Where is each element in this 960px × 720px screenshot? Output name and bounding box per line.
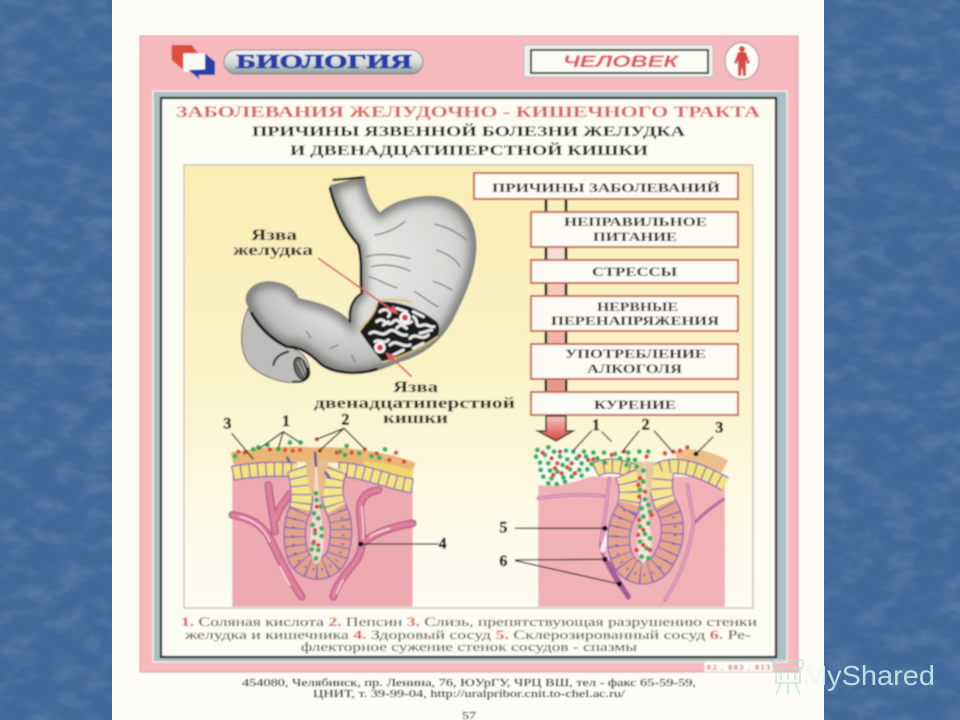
epithelium surface (595, 466, 725, 575)
cell nuclei (293, 510, 343, 570)
page sheet (112, 0, 824, 720)
epithelium surface (232, 468, 413, 570)
numbers: 4 (439, 536, 447, 553)
vessels (232, 485, 413, 597)
acid dots (536, 447, 650, 558)
numbers: 1 (592, 417, 600, 434)
numbers (499, 416, 723, 570)
cause: alcohol (531, 344, 738, 379)
poster (140, 36, 798, 720)
crypt lumen (310, 457, 324, 564)
title: И ДВЕНАДЦАТИПЕРСТНОЙ КИШКИ (290, 142, 649, 159)
stomach body (246, 177, 476, 374)
label: duodenal ulcer: Язва (393, 379, 438, 396)
cause: stress (531, 260, 738, 283)
mucosa cutaway (360, 301, 439, 362)
illustration: stomach (242, 177, 476, 382)
title: ЗАБОЛЕВАНИЯ ЖЕЛУДОЧНО - КИШЕЧНОГО ТРАКТА (176, 104, 761, 121)
eroded surface (537, 447, 597, 486)
cause: poor diet: НЕПРАВИЛЬНОЕ (564, 214, 707, 229)
histology: healthy tissue (223, 412, 447, 607)
numbers (223, 412, 447, 553)
pepsin dots (543, 447, 687, 550)
title: ПРИЧИНЫ ЯЗВЕННОЙ БОЛЕЗНИ ЖЕЛУДКА (252, 123, 686, 140)
label: stomach ulcer: Язва (251, 227, 297, 244)
label: duodenal ulcer: кишки (383, 410, 448, 427)
histology: damaged tissue (499, 416, 725, 607)
panel: pink poster frame (140, 36, 798, 672)
pointers (232, 428, 438, 544)
label: duodenal ulcer: двенадцатиперстной (314, 395, 515, 412)
cause: smoking (531, 392, 738, 415)
crypt top opening (305, 460, 328, 497)
connectors between cause boxes (546, 199, 566, 392)
body edge shading (246, 177, 476, 374)
duodenum opening (291, 356, 310, 381)
pointer lines (318, 258, 412, 377)
legend caption: желудка и кишечника 4. Здоровый сосуд 5. Склерозированный сосуд 6. Ре- (184, 628, 751, 642)
panel: black framed content (161, 98, 776, 657)
mucus remnant (677, 456, 725, 467)
pointers (515, 431, 713, 584)
numbers: 3 (223, 416, 231, 433)
label: duodenal ulcer (314, 379, 515, 427)
connective tissue (538, 477, 725, 607)
panel: causes header: ПРИЧИНЫ ЗАБОЛЕВАНИЙ (492, 180, 720, 195)
crypt (619, 472, 672, 573)
logo (172, 45, 215, 79)
crypt (295, 468, 341, 569)
numbers: 5 (499, 520, 507, 537)
heading: Biology pill (224, 50, 423, 74)
panel: grey inner border (153, 91, 787, 662)
numbers: 2 (642, 416, 650, 433)
ulcers (399, 312, 411, 323)
cause: stress: СТРЕССЫ (592, 264, 677, 279)
legend caption (181, 615, 757, 654)
cause: poor diet (531, 212, 738, 247)
panel: causes header (474, 173, 738, 199)
cause: nervous strain (531, 296, 738, 331)
dark contours (252, 177, 377, 382)
panel: yellow diagram area (184, 165, 753, 608)
cause: alcohol: УПОТРЕБЛЕНИЕ (565, 346, 706, 361)
cell nuclei (616, 510, 675, 575)
title (176, 104, 761, 159)
sclerotic vessels (538, 478, 723, 600)
numbers: 1 (282, 413, 290, 430)
duodenum lower loop (242, 308, 309, 382)
heading: Human box: ЧЕЛОВЕК (563, 52, 680, 71)
footer address (242, 678, 696, 700)
mucosa rim (357, 299, 437, 362)
numbers: 3 (715, 420, 723, 437)
icon: easel (773, 660, 803, 695)
mucus layer (232, 454, 413, 470)
heading: Human box (524, 45, 713, 77)
crypt lumen (637, 460, 651, 563)
cause: smoking: КУРЕНИЕ (594, 397, 676, 412)
arrow: causes to damaged tissue (538, 416, 573, 441)
pepsin dots (238, 439, 404, 545)
label: stomach ulcer: желудка (233, 242, 313, 259)
label: stomach ulcer (233, 227, 313, 259)
wrinkles (307, 222, 467, 362)
numbers: 6 (499, 553, 507, 570)
crypt top opening (635, 462, 655, 497)
numbers: 2 (341, 412, 349, 429)
footer address: ЦНИТ, т. 39-99-04, http://uralpribor.cnit.to-chel.ac.ru/ (313, 689, 625, 700)
icon: human figure (725, 42, 759, 80)
acid dots (235, 443, 385, 558)
heading: Biology pill: БИОЛОГИЯ (236, 51, 413, 73)
legend caption: флекторное сужение стенок сосудов - спазмы (301, 640, 638, 654)
code tag: 02 . 003 . 013 (707, 663, 770, 672)
cause: poor diet: ПИТАНИЕ (593, 229, 677, 244)
legend caption: 1. Соляная кислота 2. Пепсин 3. Слизь, препятствующая разрушению стенки (181, 615, 757, 629)
watermark: MyShared: MyShared (803, 660, 935, 691)
cause: nervous strain: ПЕРЕНАПРЯЖЕНИЯ (551, 313, 720, 328)
cause: nervous strain: НЕРВНЫЕ (597, 299, 678, 314)
connective tissue (232, 477, 413, 607)
footer address: 454080, Челябинск, пр. Ленина, 76, ЮУрГУ, ЧРЦ ВШ, тел - факс 65-59-59, (242, 678, 696, 689)
cause: alcohol: АЛКОГОЛЯ (587, 361, 683, 376)
